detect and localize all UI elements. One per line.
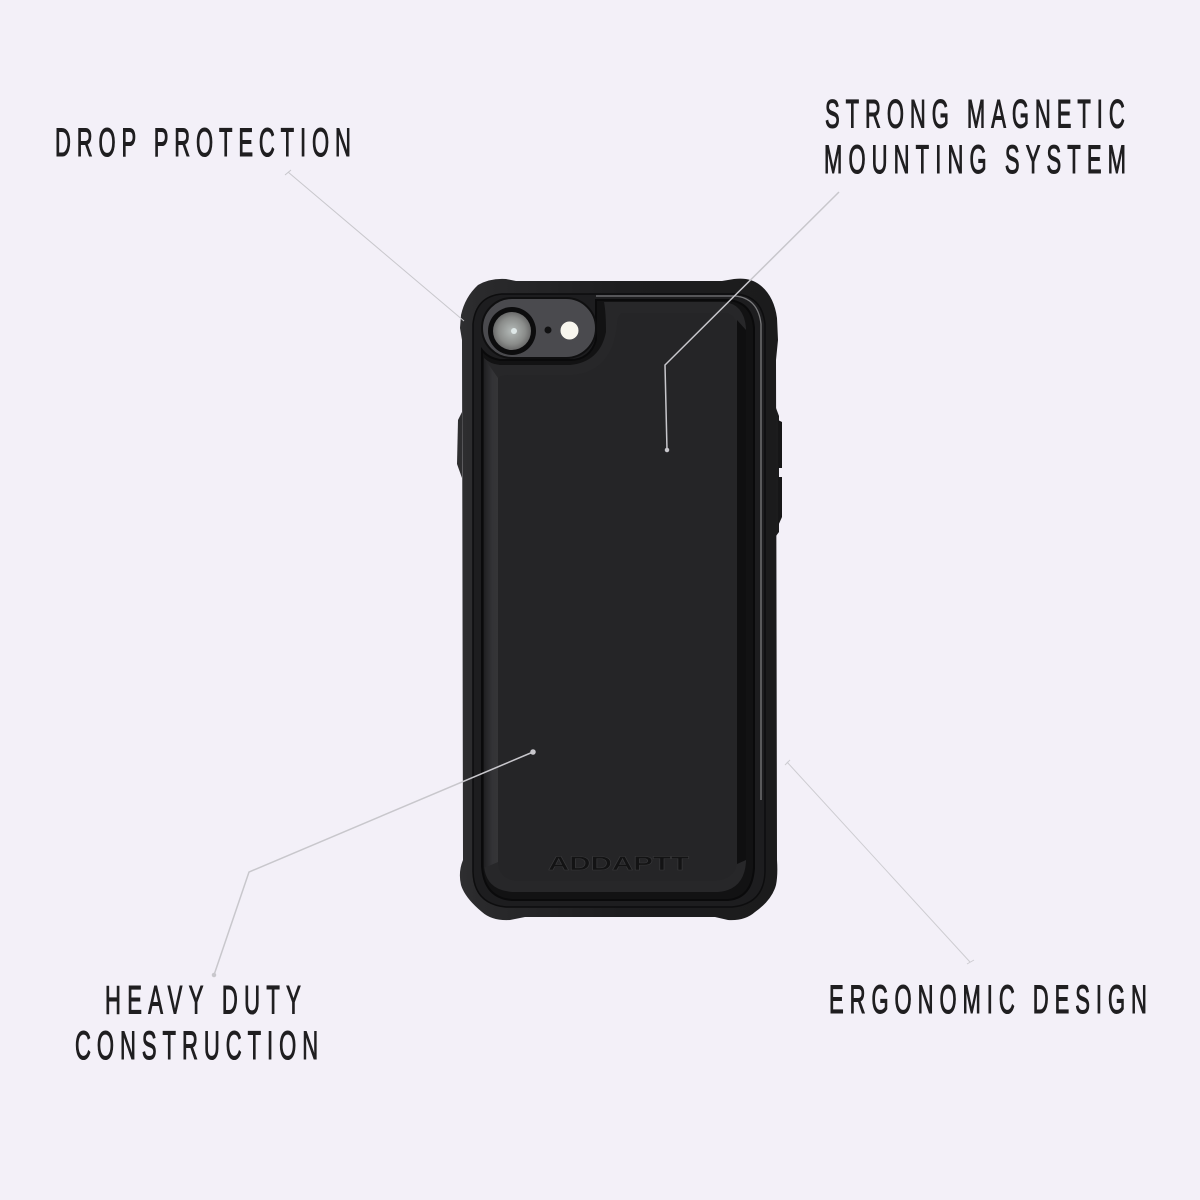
logo: ADDAPTT [548,854,690,875]
label: heavy duty construction [75,978,318,1068]
leader line: ergonomic design [785,760,974,964]
label: strong magnetic mounting system [824,92,1126,182]
panel face [498,313,737,881]
phone case [457,279,782,920]
outer shell [460,279,778,920]
label: drop protection: DROP PROTECTION [55,120,351,165]
inner rim [473,294,765,907]
label: strong magnetic mounting system: MOUNTING SYSTEM [824,137,1126,182]
black tray groove [482,300,754,900]
camera island [482,298,596,358]
microphone [544,326,552,334]
side buttons [457,408,782,536]
raised leather panel [484,302,746,892]
label: ergonomic design: ERGONOMIC DESIGN [829,977,1147,1022]
panel shadow right [737,320,746,864]
panel bevel left [484,358,498,868]
label: strong magnetic mounting system: STRONG MAGNETIC [825,92,1125,136]
lens [488,307,536,355]
label: heavy duty construction: CONSTRUCTION [75,1023,318,1068]
label: heavy duty construction: HEAVY DUTY [105,978,301,1022]
leader line: drop protection [285,170,464,321]
flash [560,322,578,340]
leader line: heavy duty [212,750,535,976]
leader line: magnetic mounting [665,192,839,452]
glossy rim highlight [596,296,761,800]
